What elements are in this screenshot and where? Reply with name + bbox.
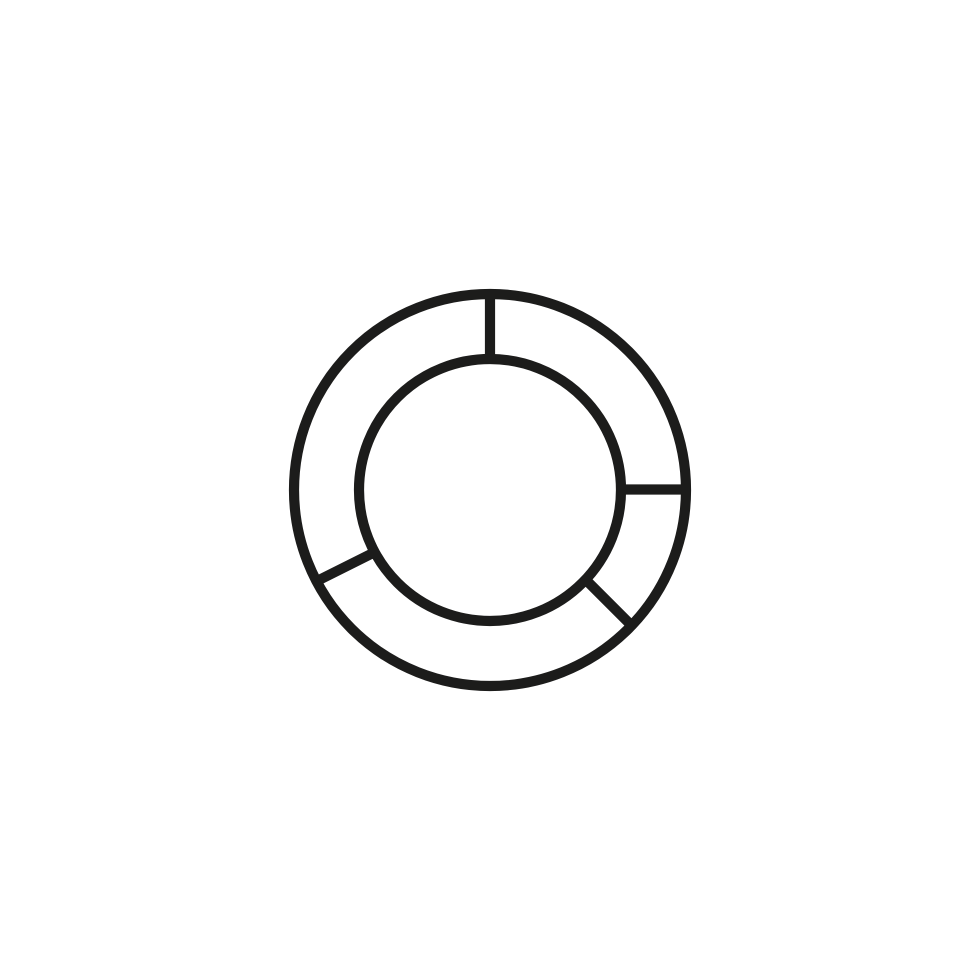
- outer ring: [294, 294, 686, 686]
- inner ring: [359, 359, 621, 621]
- segment divider: lower right: [587, 581, 630, 624]
- segment divider: right: [621, 484, 686, 495]
- segment divider: lower left: [317, 553, 373, 581]
- segment divider: top: [485, 294, 495, 359]
